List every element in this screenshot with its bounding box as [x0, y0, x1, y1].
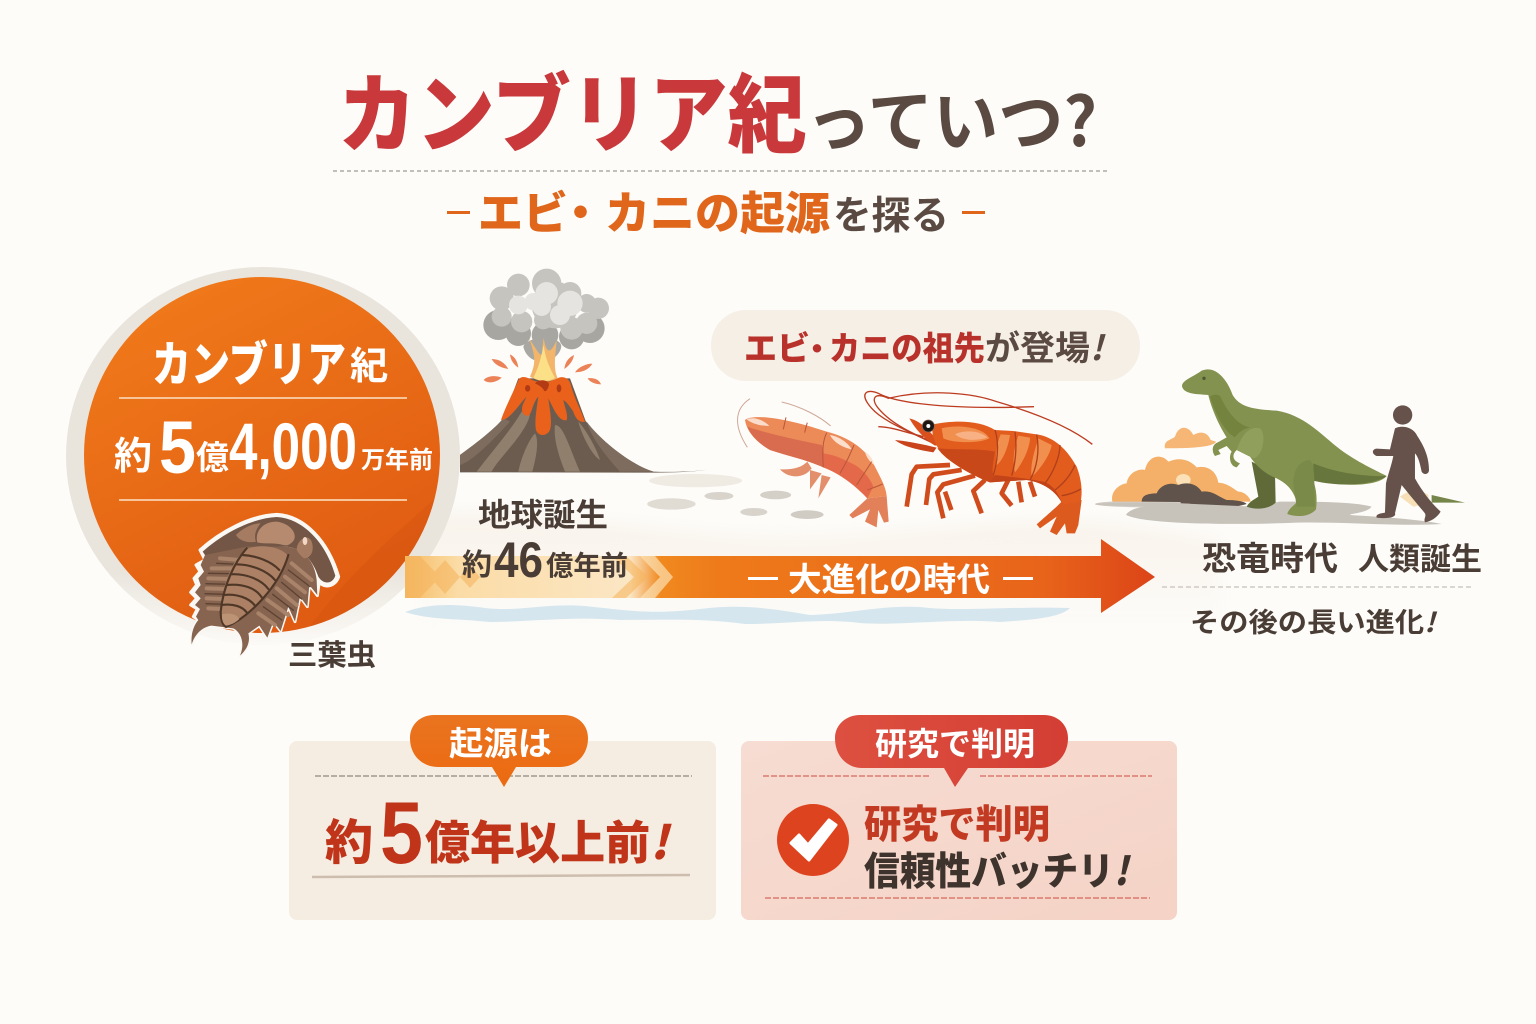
title — [338, 45, 1097, 170]
plume — [529, 338, 558, 381]
lava — [501, 377, 585, 435]
icon: volcano — [460, 269, 707, 473]
icon: right shrimp — [865, 391, 1092, 535]
origin text — [325, 783, 673, 882]
subtitle: を探る — [833, 185, 949, 241]
research text: 研究で判明 — [864, 794, 1050, 850]
callout: ancestors appear: エビ — [744, 322, 810, 370]
legs — [907, 465, 1035, 518]
timeline arrow — [405, 539, 1155, 613]
subtitle: エビ — [478, 177, 568, 242]
research text — [864, 794, 1131, 897]
research tag: 研究で判明 — [875, 719, 1035, 765]
subtitle — [447, 177, 985, 242]
icon: human silhouette — [1373, 405, 1441, 522]
origin tag — [410, 715, 588, 787]
origin text: 約 — [325, 803, 373, 873]
icon: check mark — [777, 804, 849, 876]
chevrons — [405, 556, 648, 598]
callout: ancestors appear: カニの祖先 — [829, 322, 985, 370]
subtitle: カニの起源 — [605, 177, 830, 242]
date: 540 million years ago: 5 — [159, 406, 196, 489]
arrow label — [748, 553, 1033, 601]
tail fan — [1037, 500, 1082, 535]
smoke cloud — [483, 269, 609, 362]
mountain — [460, 378, 707, 473]
research text: 信頼性バッチリ! — [864, 841, 1131, 897]
callout: ancestors appear — [711, 310, 1140, 381]
icon: trilobite — [191, 514, 339, 656]
eye — [922, 420, 934, 432]
panel: Cambrian circle — [66, 267, 460, 645]
ground band — [420, 514, 1220, 630]
origin tag: 起源は — [449, 717, 552, 765]
antennae — [865, 391, 1092, 445]
body — [932, 422, 1082, 504]
label: dinosaur era, humans: 人類誕生 — [1358, 534, 1482, 579]
panel: research — [741, 715, 1177, 920]
trilobite shell — [203, 517, 335, 583]
callout: ancestors appear: が登場! — [985, 321, 1107, 370]
lava splashes — [484, 354, 601, 384]
heading: Cambrian: 紀 — [350, 335, 388, 390]
water — [405, 605, 1070, 624]
pleura stripes — [207, 558, 312, 625]
origin text: 5 — [380, 783, 423, 882]
subtitle: ・ — [558, 177, 603, 242]
tail fan — [849, 496, 889, 527]
label: date of Earth birth: 46 — [494, 532, 543, 588]
label: date of Earth birth: 億年前 — [546, 543, 628, 583]
icon: left shrimp — [738, 399, 889, 527]
icon: dinosaur — [1182, 369, 1465, 516]
head lobes — [257, 522, 295, 545]
label: trilobite: 三葉虫 — [288, 632, 376, 674]
ground shadow — [1126, 502, 1442, 525]
mouthparts — [909, 418, 942, 446]
panel: origin — [289, 715, 716, 920]
date: 540 million years ago: 万年前 — [361, 440, 433, 475]
arrow label: 大進化の時代 — [788, 553, 990, 601]
body — [745, 417, 887, 498]
title: っていつ? — [806, 67, 1097, 166]
heading: Cambrian: カンブリア — [152, 325, 346, 395]
label: Earth birth: 地球誕生 — [478, 490, 608, 536]
shell highlights — [942, 427, 1052, 477]
title: カンブリア紀 — [338, 45, 806, 170]
icon: bushes and smoke — [1095, 428, 1442, 525]
swimmerets — [780, 462, 831, 498]
origin text: 億年以上前! — [425, 807, 673, 873]
research tag — [835, 715, 1068, 787]
axis — [221, 546, 287, 627]
date: 540 million years ago: 億 — [196, 431, 229, 479]
text: long evolution: その後の長い進化 ! — [1190, 601, 1438, 640]
date: 540 million years ago: 約 — [114, 425, 152, 480]
ground rocks — [647, 474, 824, 519]
date: 540 million years ago: 4,000 — [229, 409, 357, 483]
date: 540 million years ago — [114, 406, 433, 489]
callout: ancestors appear: ・ — [802, 325, 832, 369]
label: date of Earth birth — [462, 532, 628, 588]
label: dinosaur era, humans — [1202, 532, 1482, 580]
label: dinosaur era, humans: 恐竜時代 — [1202, 532, 1338, 580]
label: date of Earth birth: 約 — [462, 540, 492, 584]
